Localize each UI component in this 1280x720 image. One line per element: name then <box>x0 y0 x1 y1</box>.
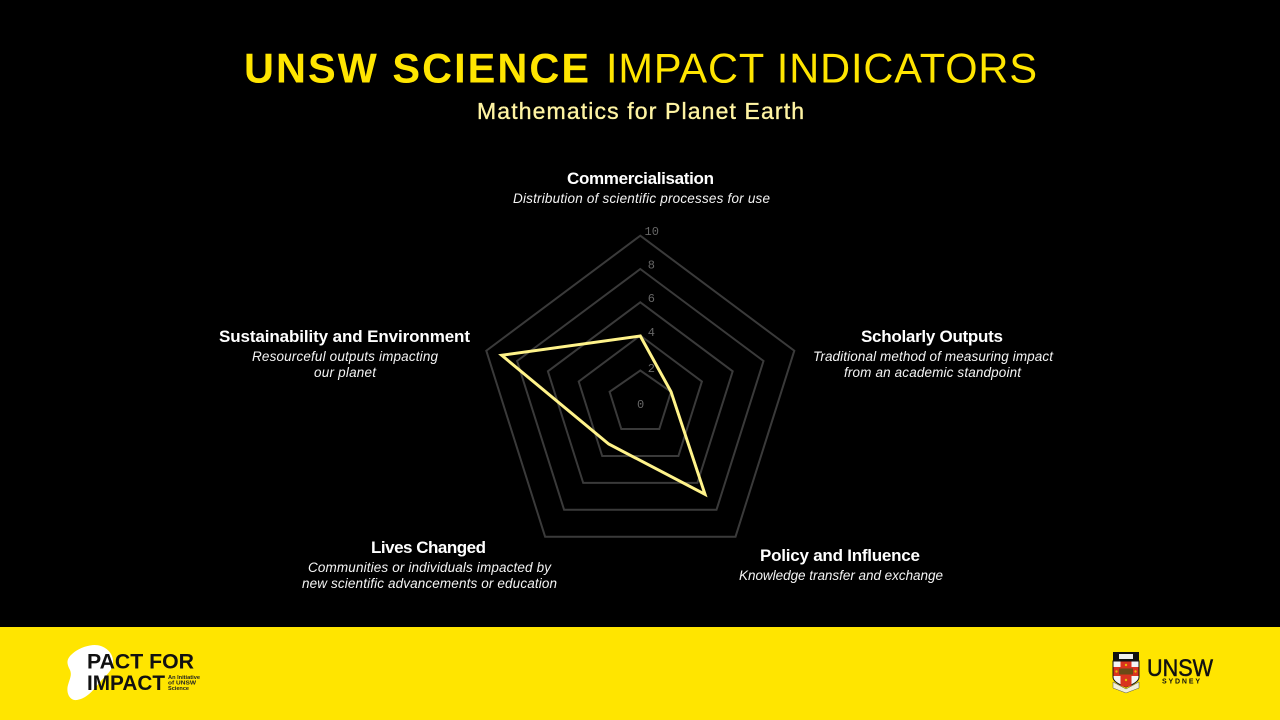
label: lives changed: Lives Changed <box>371 538 486 557</box>
radar grid rings <box>486 236 794 537</box>
subtitle: Mathematics for Planet Earth <box>477 98 804 124</box>
logo: unsw sydney: SYDNEY <box>1162 678 1200 686</box>
logo: pact for impact: An Initiative <box>168 675 200 681</box>
logo: pact for impact <box>67 645 200 700</box>
axis scale numbers: 2 <box>648 362 655 376</box>
title <box>244 44 1037 91</box>
logo: unsw sydney: UNSW <box>1147 655 1214 682</box>
axis scale numbers: 6 <box>648 292 655 306</box>
label: scholarly outputs: Traditional method of measuring impact <box>813 349 1054 364</box>
label: scholarly outputs: Scholarly Outputs <box>861 327 1003 346</box>
data polygon <box>502 336 705 494</box>
label: sustainability and environment <box>219 327 470 380</box>
label: commercialisation: Commercialisation <box>567 169 714 188</box>
axis scale numbers: 8 <box>648 258 655 272</box>
title: UNSW SCIENCE <box>244 44 589 91</box>
label: policy and influence: Policy and Influence <box>760 546 920 565</box>
label: sustainability and environment: our planet <box>314 365 377 380</box>
logo: pact for impact: Science <box>168 686 189 692</box>
title: IMPACT INDICATORS <box>606 44 1037 91</box>
logo: unsw sydney <box>1113 652 1214 693</box>
logo: pact for impact: of UNSW <box>168 680 196 686</box>
logo: pact for impact: IMPACT <box>87 671 165 695</box>
label: scholarly outputs <box>813 327 1054 380</box>
label: commercialisation: Distribution of scientific processes for use <box>513 191 770 206</box>
axis scale numbers <box>637 225 659 412</box>
label: lives changed: Communities or individuals impacted by <box>308 560 552 575</box>
icon: white blob <box>67 645 113 700</box>
icon: crest <box>1113 652 1139 693</box>
label: sustainability and environment: Sustainability and Environment <box>219 327 470 346</box>
axis scale numbers: 0 <box>637 398 644 412</box>
label: lives changed: new scientific advancements or education <box>302 576 557 591</box>
label: commercialisation <box>513 169 770 206</box>
label: lives changed <box>302 538 557 591</box>
label: policy and influence: Knowledge transfer and exchange <box>739 568 943 583</box>
label: scholarly outputs: from an academic standpoint <box>844 365 1022 380</box>
footer band <box>0 627 1280 720</box>
label: policy and influence <box>739 546 943 583</box>
axis scale numbers: 10 <box>644 225 659 239</box>
logo: pact for impact: PACT FOR <box>87 650 194 674</box>
axis scale numbers: 4 <box>648 326 655 340</box>
label: sustainability and environment: Resourceful outputs impacting <box>252 349 438 364</box>
radar chart <box>486 225 794 537</box>
